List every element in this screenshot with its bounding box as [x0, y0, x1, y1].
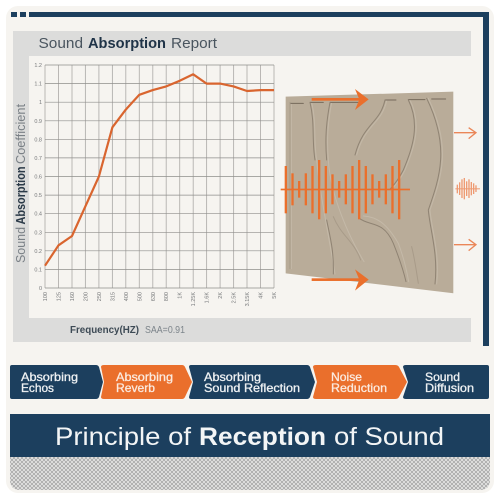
tab: Noise Reduction: [313, 365, 407, 399]
x axis labels: 250: [97, 292, 103, 301]
x axis labels: 2K: [218, 292, 224, 299]
y axis labels: 1.2: [34, 63, 42, 69]
y axis labels: 1: [39, 100, 42, 106]
y axis labels: 0.3: [34, 230, 42, 236]
reduced sound wave: [455, 178, 480, 199]
window bar: [11, 12, 489, 346]
x axis labels: 100: [43, 292, 49, 301]
title text: Principle of: [55, 423, 191, 451]
bottom arrow: [312, 269, 369, 291]
x axis labels: 5K: [272, 292, 278, 299]
wall panel: [286, 92, 453, 293]
tab: Absorbing Echos: [10, 365, 103, 399]
absorption curve: [45, 74, 274, 266]
x axis labels: 200: [83, 292, 89, 301]
x axis labels: 4K: [258, 292, 264, 299]
groove highlights: [291, 98, 442, 284]
upper exit arrow: [454, 128, 476, 139]
title text: of Sound: [334, 423, 444, 451]
tab: Noise Reduction: Reduction: [331, 381, 387, 395]
y axis labels: 0.6: [34, 174, 42, 180]
y axis title: Coefficient: [13, 104, 28, 164]
tab: Sound Diffusion: [403, 365, 489, 399]
title text: Reception: [199, 423, 326, 451]
x axis labels: 315: [110, 292, 116, 301]
y axis labels: 0.9: [34, 119, 42, 125]
x axis labels: 3.15K: [245, 292, 251, 306]
x axis labels: 1.6K: [205, 292, 211, 303]
y axis labels: 0.2: [34, 249, 42, 255]
x axis labels: 500: [137, 292, 143, 301]
report heading: Report: [171, 35, 218, 52]
line chart: [34, 63, 278, 306]
x axis labels: 160: [70, 292, 76, 301]
x axis labels: 2.5K: [232, 292, 238, 303]
lower exit arrow: [454, 239, 476, 251]
y axis labels: 0.5: [34, 193, 42, 199]
tab: Noise Reduction: Noise: [331, 370, 362, 384]
x axis labels: 125: [56, 292, 62, 301]
x axis labels: 400: [124, 292, 130, 301]
y axis labels: 0.4: [34, 212, 42, 218]
report heading: Absorption: [88, 35, 166, 52]
x axis labels: 630: [151, 292, 157, 301]
tab: Sound Diffusion: Sound: [425, 370, 460, 384]
y axis title: [13, 104, 28, 263]
x axis labels: [43, 292, 278, 306]
report heading: Sound: [38, 35, 83, 52]
incoming sound wave: [281, 160, 410, 219]
x axis caption: [70, 325, 185, 336]
tab: Absorbing Reverb: Reverb: [116, 381, 155, 395]
x axis caption: Frequency(HZ): [70, 325, 139, 336]
title banner: [10, 414, 490, 457]
y axis labels: 0: [39, 286, 42, 292]
tab: Absorbing Sound Reflection: Sound Reflection: [204, 381, 300, 395]
y axis labels: 0.7: [34, 156, 42, 162]
tab: Absorbing Reverb: Absorbing: [116, 370, 173, 384]
report panel: [13, 31, 471, 342]
y axis labels: 0.8: [34, 137, 42, 143]
title text: [55, 423, 444, 451]
tab: Absorbing Echos: Echos: [21, 381, 54, 395]
panel grooves: [290, 98, 446, 284]
checker footer: [10, 457, 490, 490]
y axis labels: 1.1: [34, 82, 42, 88]
y axis title: Absorption: [13, 166, 28, 224]
x axis caption: SAA=0.91: [145, 325, 185, 336]
tab: Absorbing Sound Reflection: [189, 365, 315, 399]
report heading: [38, 35, 218, 52]
x axis labels: 1.25K: [191, 292, 197, 306]
tab: Sound Diffusion: Diffusion: [425, 381, 474, 395]
top arrow: [312, 89, 369, 110]
groove shadows: [290, 98, 446, 284]
step tabs: [10, 365, 489, 399]
acoustic panel illustration: [281, 89, 480, 293]
y axis labels: [34, 63, 42, 292]
x axis labels: 800: [164, 292, 170, 301]
x axis labels: 1K: [178, 292, 184, 299]
tab: Absorbing Sound Reflection: Absorbing: [204, 370, 261, 384]
tab: Absorbing Reverb: [101, 365, 192, 399]
y axis labels: 0.1: [34, 267, 42, 273]
tab: Absorbing Echos: Absorbing: [21, 370, 78, 384]
y axis title: Sound: [13, 227, 28, 263]
